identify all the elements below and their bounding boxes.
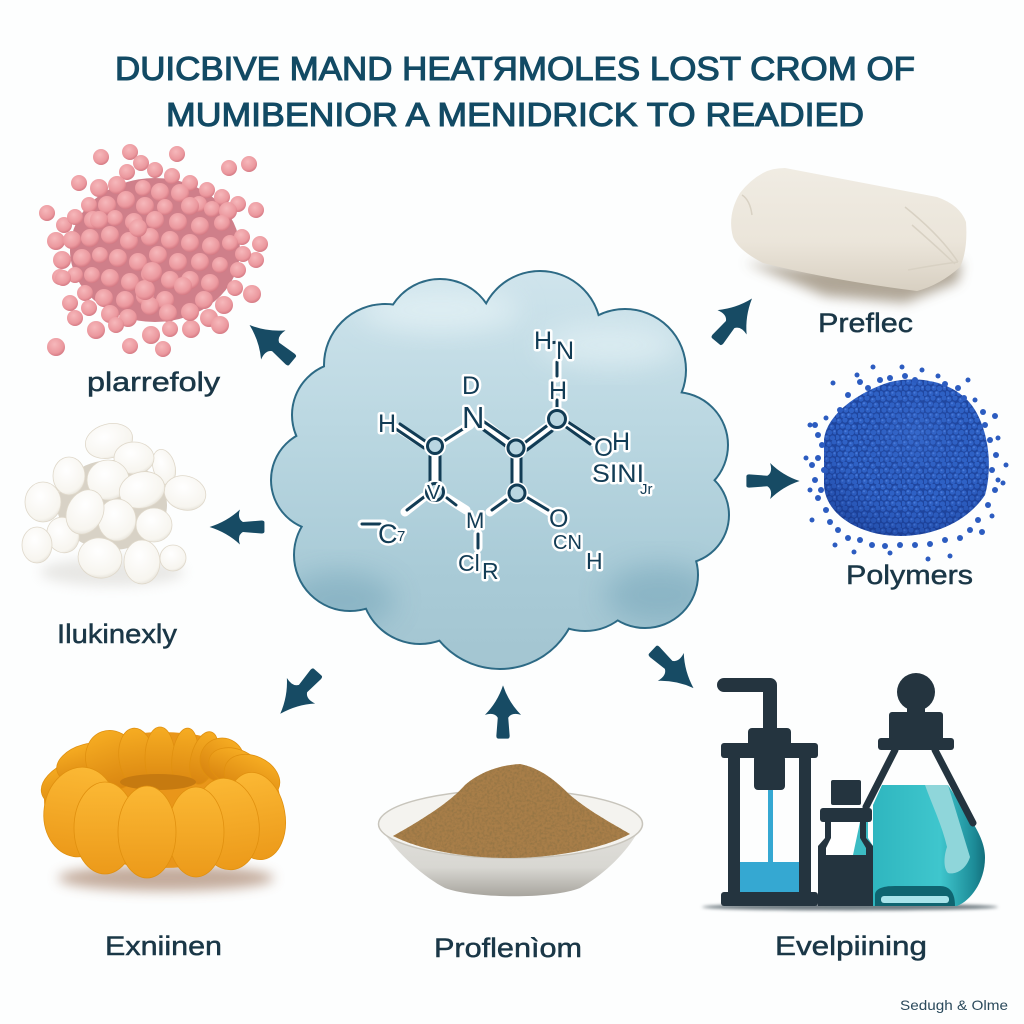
icon: dropper stand (717, 678, 818, 906)
molecule: H (549, 377, 567, 405)
arrow: to white pebbles (210, 510, 264, 544)
arrow: from bowl to cloud (485, 685, 521, 739)
molecule: R (482, 558, 499, 584)
molecule: O (549, 505, 568, 533)
molecule: H (534, 327, 552, 355)
molecule: H (586, 548, 603, 574)
molecule: V (427, 482, 441, 504)
panel: white pebbles (22, 418, 210, 586)
molecule: M (466, 508, 484, 533)
label: Evelpiining: Evelpiining (775, 931, 927, 961)
panel: bowl of brown powder (378, 764, 642, 896)
panel: yellow ring (35, 723, 292, 891)
title: MUMIBENIOR A MENIDRICK TO READIED (166, 96, 864, 133)
molecule: H (378, 410, 396, 438)
panel: pink pellets (39, 144, 268, 357)
central cloud with molecule (260, 260, 740, 680)
icon: teal flask (866, 673, 985, 906)
title: DUICBIVE MAND HEATЯMOLES LOST CROM OF (115, 50, 915, 87)
arrow: to yellow ring (266, 659, 332, 727)
arrow: to lab equipment (640, 636, 706, 702)
arrow: to pink pellets (237, 310, 305, 376)
cloud outline (272, 272, 728, 668)
molecule: CN (553, 532, 582, 554)
title (115, 50, 915, 133)
molecule: C (378, 519, 398, 549)
molecule: Jr (640, 481, 652, 498)
label: Polymers: Polymers (846, 560, 973, 590)
molecule: O (594, 434, 613, 462)
label: Exniinen: Exniinen (105, 931, 222, 961)
molecule: N (462, 400, 484, 435)
molecule: H (612, 428, 630, 456)
panel: lab equipment (702, 673, 998, 910)
label: Proflenìom: Proflenìom (434, 933, 582, 963)
molecule (362, 327, 652, 584)
molecule: 7 (397, 528, 405, 545)
icon: small bottle (818, 780, 873, 906)
footer credit: Sedugh & Olme (900, 997, 1008, 1013)
molecule: Cl (458, 550, 480, 576)
label: Preflec: Preflec (818, 308, 913, 338)
label: Ilukinexly: Ilukinexly (57, 619, 178, 649)
arrow: to polymers (746, 463, 800, 499)
molecule: D (462, 372, 480, 400)
molecule: N (556, 337, 574, 365)
panel: blue polymer granules (804, 364, 1008, 562)
arrow: to pillow (701, 286, 767, 354)
cloud fill (272, 272, 728, 668)
panel: cream pillow (731, 168, 966, 303)
molecule: SINI (592, 460, 644, 488)
label: plarrefoly: plarrefoly (87, 367, 221, 397)
